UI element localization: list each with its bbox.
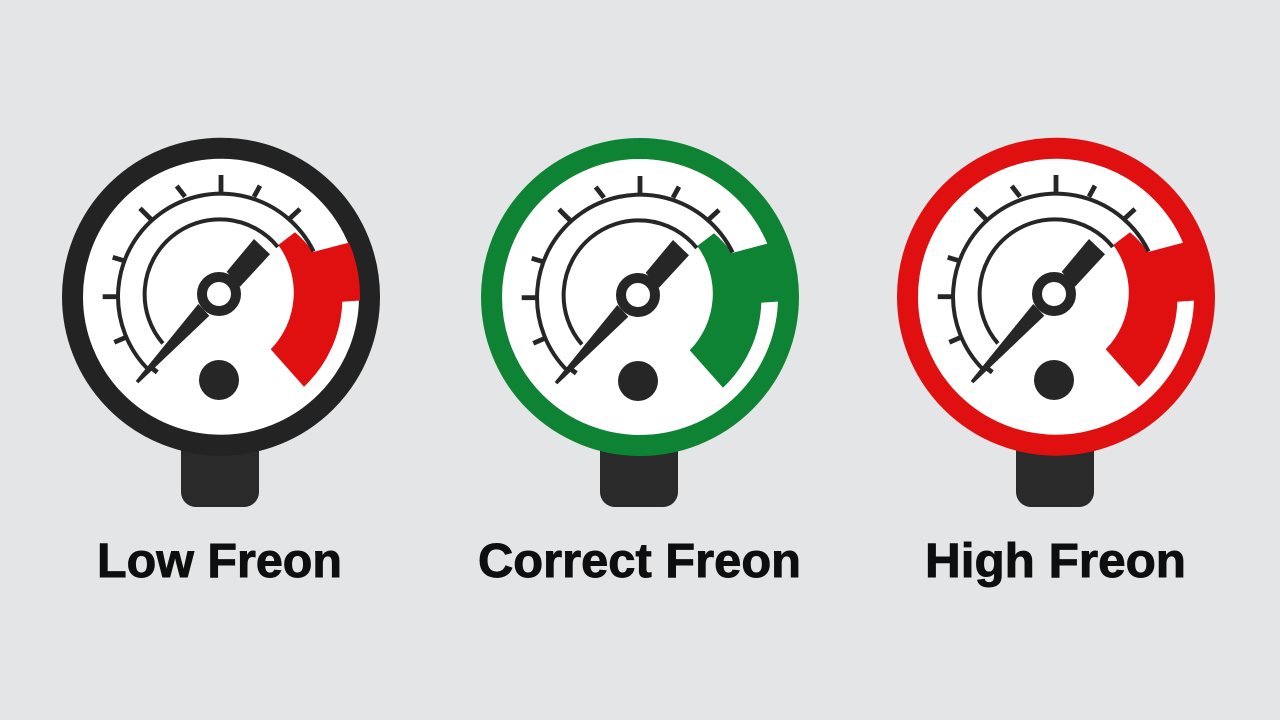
scale arcs and ticks — [522, 176, 733, 373]
lower dot — [1034, 360, 1074, 400]
red zone — [1106, 232, 1203, 387]
scale arcs and ticks — [938, 175, 1149, 372]
lower dot — [199, 360, 239, 400]
gauge face and ring — [908, 148, 1204, 445]
label: correct freon: Correct Freon — [478, 535, 801, 588]
green zone — [690, 233, 787, 388]
red zone — [271, 232, 360, 387]
lower dot — [618, 361, 658, 401]
label: low freon: Low Freon — [97, 535, 342, 588]
gauge: high freon — [908, 148, 1204, 507]
gauge stem — [181, 435, 259, 507]
gauge stem — [600, 436, 678, 507]
needle hub — [202, 277, 236, 311]
scale arcs and ticks — [103, 175, 314, 372]
gauge: correct freon — [492, 148, 788, 507]
label: high freon: High Freon — [925, 535, 1186, 588]
needle — [971, 239, 1105, 383]
needle — [555, 240, 689, 384]
gauge face and ring — [492, 148, 788, 446]
gauge stem — [1016, 435, 1094, 507]
gauge face and ring — [72, 148, 370, 445]
needle — [136, 239, 270, 383]
needle hub — [1037, 277, 1071, 311]
gauge: low freon — [72, 148, 370, 507]
needle hub — [621, 278, 655, 312]
